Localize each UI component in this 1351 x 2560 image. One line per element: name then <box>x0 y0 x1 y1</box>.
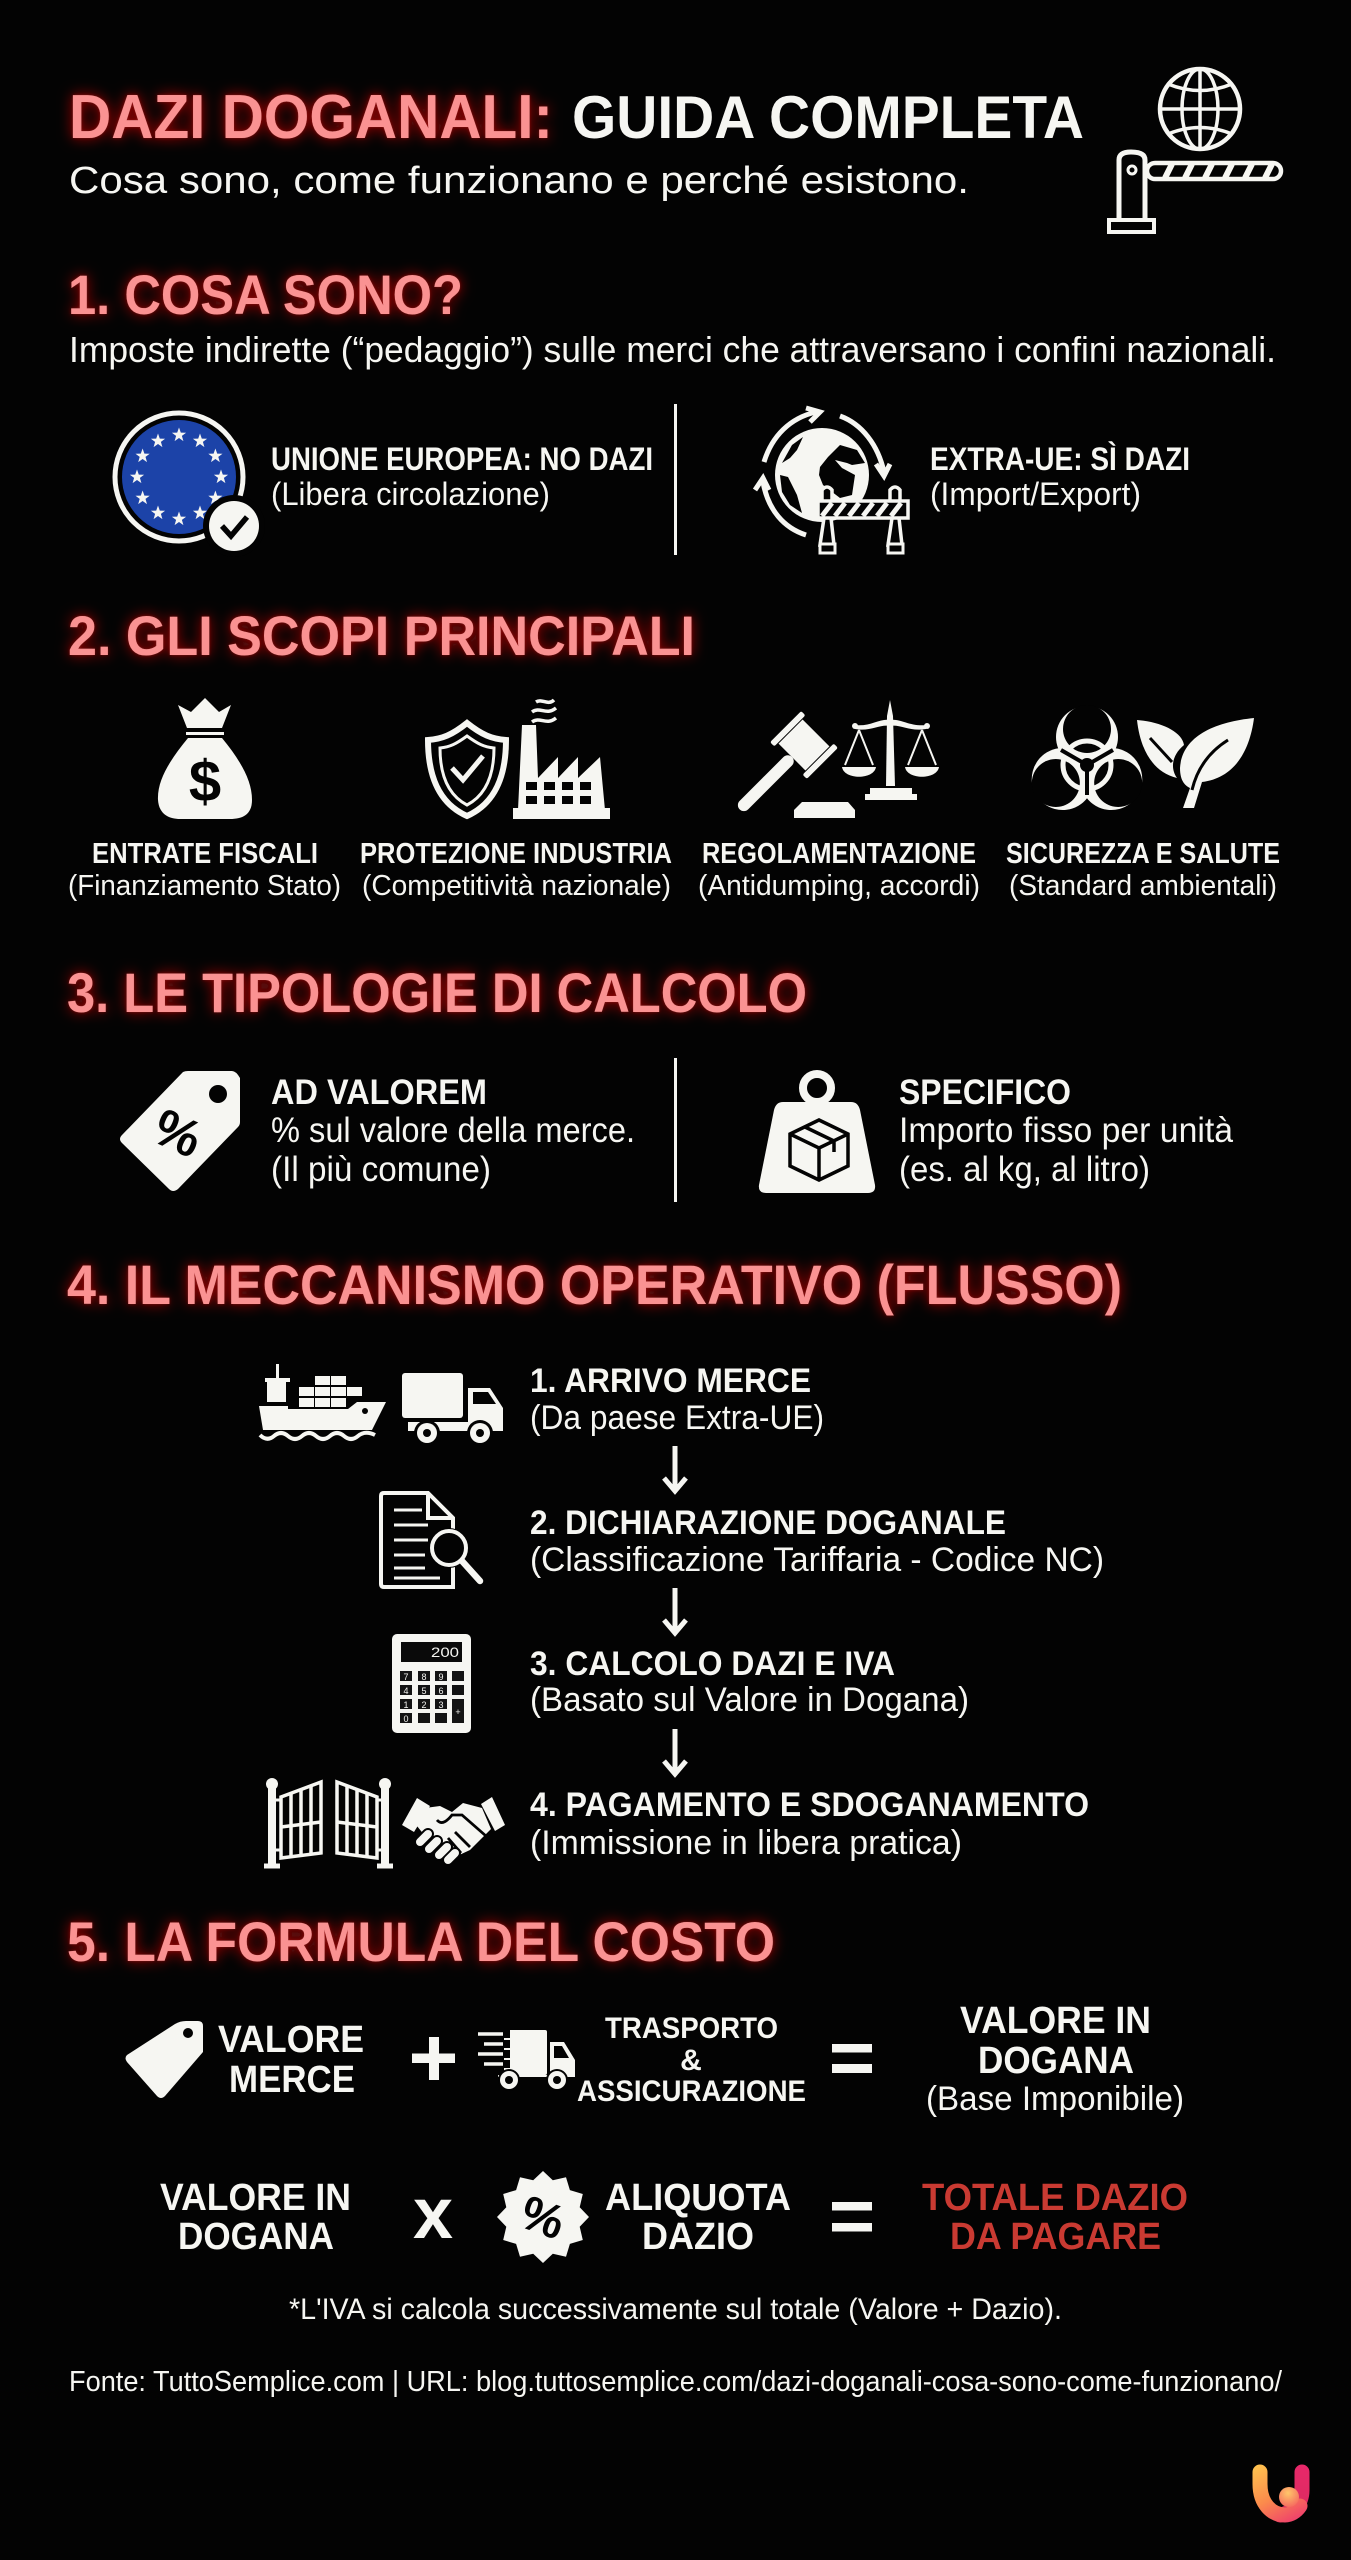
label: valore in dogana: VALORE IN <box>160 2177 351 2219</box>
arrow: step 3 to 4 <box>664 1729 686 1774</box>
label: sicurezza e salute: SICUREZZA E SALUTE <box>1006 838 1280 870</box>
label: trasporto e assicurazione <box>577 2012 806 2108</box>
footnote: *L'IVA si calcola successivamente sul totale (Valore + Dazio). <box>289 2293 1062 2326</box>
label: sicurezza e salute: (Standard ambientali) <box>1009 870 1277 902</box>
label: entrate fiscali <box>68 838 341 902</box>
step 4 text: 4. PAGAMENTO E SDOGANAMENTO <box>530 1786 1089 1824</box>
heading: 1. COSA SONO? <box>68 263 463 326</box>
icon: globe with customs barrier <box>1109 69 1281 232</box>
label: specifico: (es. al kg, al litro) <box>899 1150 1150 1189</box>
icon: open gate <box>264 1778 393 1866</box>
operator: plus <box>412 2037 455 2080</box>
icon: gavel and scales <box>721 700 939 828</box>
result: totale dazio <box>922 2177 1188 2258</box>
icon: cargo ship <box>259 1364 386 1439</box>
heading: 2. GLI SCOPI PRINCIPALI <box>68 604 695 667</box>
label: protezione industria: PROTEZIONE INDUSTRIA <box>360 838 672 870</box>
icon: calculator: 7 <box>403 1672 409 1682</box>
panel: 1. cosa sono <box>68 263 1276 557</box>
label: ad valorem: (Il più comune) <box>271 1150 491 1189</box>
icon: calculator: 3 <box>438 1700 444 1710</box>
title: GUIDA COMPLETA <box>572 84 1084 151</box>
panel: 4. meccanismo operativo <box>67 1253 1122 1866</box>
label: entrate fiscali: (Finanziamento Stato) <box>68 870 341 902</box>
result: totale dazio: TOTALE DAZIO <box>922 2177 1188 2219</box>
step 3 text <box>530 1645 969 1719</box>
operator: times: x <box>413 2174 453 2254</box>
step 2 text <box>530 1504 1104 1579</box>
logo <box>1260 2472 1302 2515</box>
definition text: Imposte indirette (“pedaggio”) sulle merci che attraversano i confini nazionali. <box>69 329 1276 370</box>
icon: weight with parcel <box>759 1074 875 1193</box>
label: protezione industria <box>360 838 672 902</box>
label: valore merce: MERCE <box>229 2059 355 2101</box>
icon: calculator: + <box>455 1707 461 1717</box>
label: valore merce <box>218 2019 364 2101</box>
icon: percent price tag: % <box>145 1098 211 1170</box>
icon: delivery truck <box>402 1373 503 1446</box>
label: trasporto e assicurazione: TRASPORTO <box>605 2012 778 2045</box>
label: unione europea: (Libera circolazione) <box>271 476 550 512</box>
label: specifico: SPECIFICO <box>899 1073 1071 1112</box>
panel: 3. tipologie di calcolo <box>67 961 1234 1202</box>
result: valore in dogana: DOGANA <box>978 2040 1134 2082</box>
result: valore in dogana <box>926 2000 1184 2118</box>
icon: price tag <box>126 2021 203 2098</box>
label: valore merce: VALORE <box>218 2019 364 2061</box>
label: regolamentazione <box>698 838 980 902</box>
subtitle: Cosa sono, come funzionano e perché esistono. <box>69 160 969 202</box>
icon: shield and factory <box>428 700 610 819</box>
label: unione europea: UNIONE EUROPEA: NO DAZI <box>271 441 653 477</box>
label: trasporto e assicurazione: & <box>680 2044 702 2077</box>
label: regolamentazione: REGOLAMENTAZIONE <box>702 838 976 870</box>
operator: equals <box>832 2044 872 2073</box>
result: totale dazio: DA PAGARE <box>950 2216 1161 2258</box>
divider <box>674 404 677 555</box>
icon: calculator: 5 <box>421 1686 427 1696</box>
operator: equals <box>832 2202 872 2232</box>
heading: 3. LE TIPOLOGIE DI CALCOLO <box>67 961 807 1024</box>
icon: calculator: 6 <box>438 1686 444 1696</box>
icon: percent badge <box>497 2171 589 2263</box>
step 4 text: (Immissione in libera pratica) <box>530 1824 962 1862</box>
label: protezione industria: (Competitività nazionale) <box>362 870 671 902</box>
icon: calculator: 0 <box>403 1714 409 1724</box>
label: regolamentazione: (Antidumping, accordi) <box>698 870 980 902</box>
label: specifico <box>899 1073 1234 1189</box>
label: aliquota dazio <box>605 2177 791 2258</box>
source line: Fonte: TuttoSemplice.com | URL: blog.tuttosemplice.com/dazi-doganali-cosa-sono-come-funzionano/ <box>69 2366 1283 2398</box>
title <box>69 83 1084 152</box>
icon: money bag: $ <box>189 749 221 814</box>
step 2 text: 2. DICHIARAZIONE DOGANALE <box>530 1504 1006 1542</box>
icon: EU flag with check <box>115 413 265 557</box>
step 1 text: 1. ARRIVO MERCE <box>530 1362 811 1400</box>
label: ad valorem <box>271 1073 635 1189</box>
panel: 5. formula del costo <box>67 1910 1188 2326</box>
arrow: step 2 to 3 <box>664 1588 686 1633</box>
heading: 5. LA FORMULA DEL COSTO <box>67 1910 775 1973</box>
step 4 text <box>530 1786 1089 1862</box>
icon: money bag <box>158 698 252 819</box>
label: extra-ue: (Import/Export) <box>930 476 1141 512</box>
label: aliquota dazio: DAZIO <box>642 2216 754 2258</box>
label: valore in dogana: DOGANA <box>178 2216 334 2258</box>
step 2 text: (Classificazione Tariffaria - Codice NC) <box>530 1541 1104 1579</box>
icon: handshake <box>402 1797 505 1860</box>
icon: calculator: 9 <box>438 1672 444 1682</box>
icon: calculator: 4 <box>403 1686 409 1696</box>
label: extra-ue: EXTRA-UE: SÌ DAZI <box>930 441 1190 477</box>
icon: fast delivery truck <box>478 2030 575 2091</box>
label: ad valorem: AD VALOREM <box>271 1073 487 1112</box>
icon: percent price tag <box>120 1071 240 1191</box>
label: entrate fiscali: ENTRATE FISCALI <box>92 838 318 870</box>
icon: calculator <box>392 1634 471 1733</box>
result: valore in dogana: (Base Imponibile) <box>926 2080 1184 2118</box>
icon: document with magnifier <box>381 1493 480 1587</box>
label: aliquota dazio: ALIQUOTA <box>605 2177 791 2219</box>
step 3 text: 3. CALCOLO DAZI E IVA <box>530 1645 895 1683</box>
icon: percent badge: % <box>513 2186 572 2251</box>
icon: calculator: 1 <box>403 1700 409 1710</box>
label: ad valorem: % sul valore della merce. <box>271 1111 635 1150</box>
panel: 2. scopi principali <box>68 604 1280 902</box>
label: trasporto e assicurazione: ASSICURAZIONE <box>577 2075 806 2108</box>
icon: calculator: 200 <box>431 1644 459 1660</box>
icon: biohazard and leaves <box>1020 705 1254 821</box>
step 1 text <box>530 1362 824 1437</box>
title: DAZI DOGANALI: <box>69 83 553 152</box>
icon: calculator: 2 <box>421 1700 427 1710</box>
step 1 text: (Da paese Extra-UE) <box>530 1399 824 1437</box>
divider <box>674 1058 677 1202</box>
icon: globe with barrier <box>755 408 908 553</box>
heading: 4. IL MECCANISMO OPERATIVO (FLUSSO) <box>67 1253 1122 1316</box>
label: unione europea <box>271 441 653 512</box>
step 3 text: (Basato sul Valore in Dogana) <box>530 1681 969 1719</box>
label: valore in dogana <box>160 2177 351 2258</box>
panel: header <box>69 69 1281 232</box>
result: valore in dogana: VALORE IN <box>960 2000 1151 2042</box>
icon: calculator: 8 <box>421 1672 427 1682</box>
label: extra-ue <box>930 441 1190 512</box>
label: specifico: Importo fisso per unità <box>899 1111 1234 1150</box>
label: sicurezza e salute <box>1006 838 1280 902</box>
arrow: step 1 to 2 <box>664 1446 686 1491</box>
